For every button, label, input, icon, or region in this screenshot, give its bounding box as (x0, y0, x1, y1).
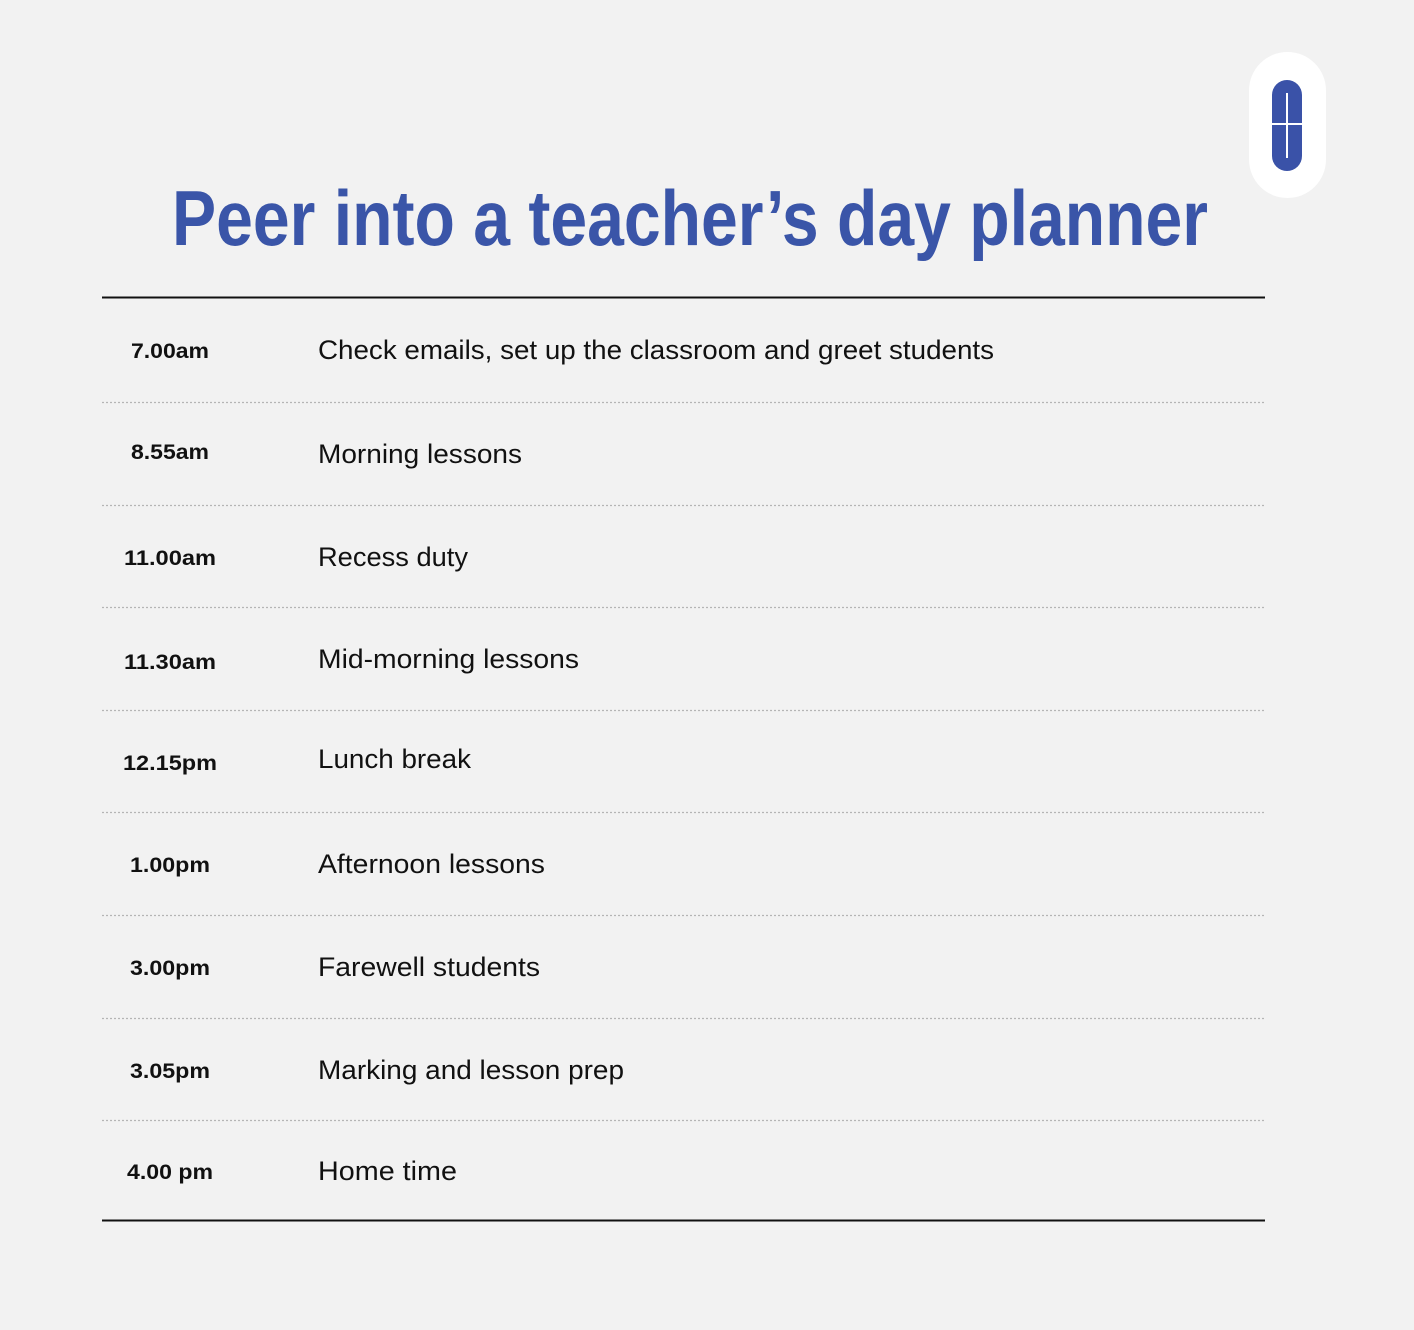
schedule activities (318, 335, 994, 1186)
schedule times: 1.00pm (130, 854, 210, 877)
schedule activities: Afternoon lessons (318, 849, 545, 879)
schedule times: 11.00am (124, 547, 216, 570)
schedule times: 11.30am (124, 651, 216, 674)
schedule times: 3.00pm (130, 957, 210, 980)
schedule activities: Farewell students (318, 952, 540, 982)
schedule activities: Mid-morning lessons (318, 644, 579, 674)
schedule activities: Lunch break (318, 744, 472, 774)
schedule times: 12.15pm (123, 752, 217, 775)
schedule activities: Recess duty (318, 542, 468, 572)
schedule activities: Home time (318, 1156, 457, 1186)
schedule times: 8.55am (131, 441, 209, 464)
title: Peer into a teacher’s day planner (172, 174, 1208, 262)
schedule activities: Marking and lesson prep (318, 1055, 624, 1085)
schedule activities: Morning lessons (318, 439, 522, 469)
icon: logo (1249, 52, 1326, 198)
schedule times (123, 340, 217, 1184)
schedule times: 4.00 pm (127, 1161, 213, 1184)
schedule activities: Check emails, set up the classroom and greet students (318, 335, 994, 365)
schedule times: 7.00am (131, 340, 209, 363)
schedule times: 3.05pm (130, 1060, 210, 1083)
